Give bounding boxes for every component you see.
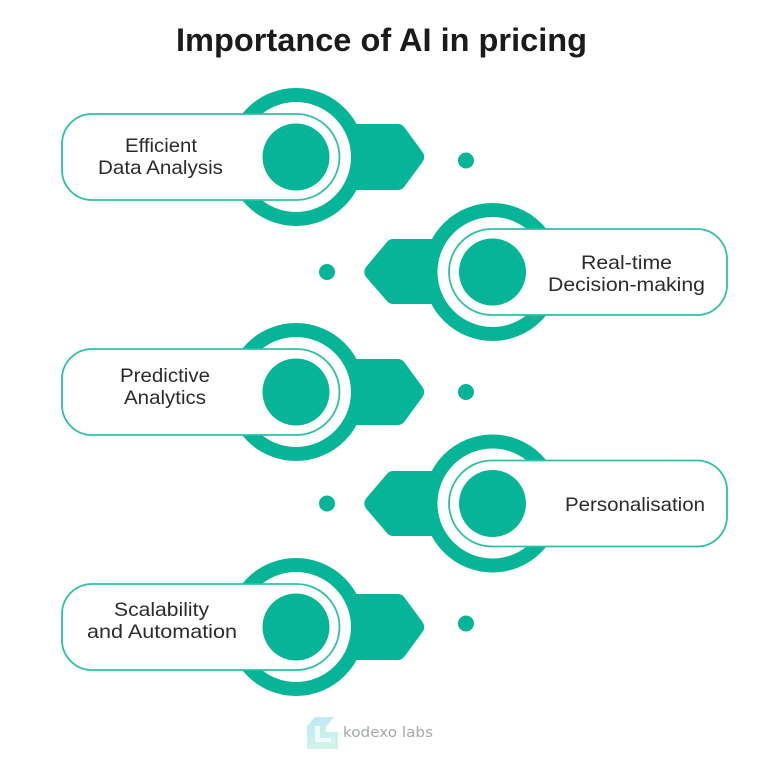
arrow tab [340,594,424,660]
label pill [449,460,727,546]
ring [234,95,358,219]
label text [548,252,705,296]
label pill [62,114,339,200]
arrow tab [340,124,424,190]
arrow tab [364,471,450,536]
logo wordmark: kodexo labs [343,725,433,741]
ring [430,210,554,334]
logo icon [307,717,338,749]
label text [87,599,237,643]
panel: Scalability and Automation [62,565,424,689]
label text: Predictive [120,365,210,387]
label pill [62,584,340,670]
arrow tab [340,359,424,425]
label text: Analytics [124,387,206,409]
label text: Decision-making [548,274,705,296]
disc [459,238,526,306]
disc [262,124,330,190]
label text: Real-time [581,252,672,274]
dot [458,616,474,632]
panel: Real-time Decision-making [364,210,727,334]
ring [234,330,358,454]
label text: Scalability [114,599,209,621]
ring [234,565,358,689]
ring [430,442,554,566]
label text: Personalisation [565,494,705,516]
title: Importance of AI in pricing [176,22,587,58]
disc [459,470,526,537]
label pill [449,229,727,315]
dot [319,496,335,512]
panel: Predictive Analytics [62,330,424,454]
label text [120,365,210,409]
label text: Efficient [125,135,198,157]
arrow tab [364,239,450,304]
disc [262,594,330,660]
label text: and Automation [87,621,237,643]
disc [262,358,330,426]
panel: Efficient Data Analysis [62,95,424,219]
dot [458,152,474,168]
dot [458,384,474,400]
label text: Data Analysis [98,157,223,179]
logo: kodexo labs [307,717,433,749]
panel: Personalisation [364,442,727,566]
label text [98,135,223,179]
dot [319,264,335,280]
label pill [62,349,340,435]
